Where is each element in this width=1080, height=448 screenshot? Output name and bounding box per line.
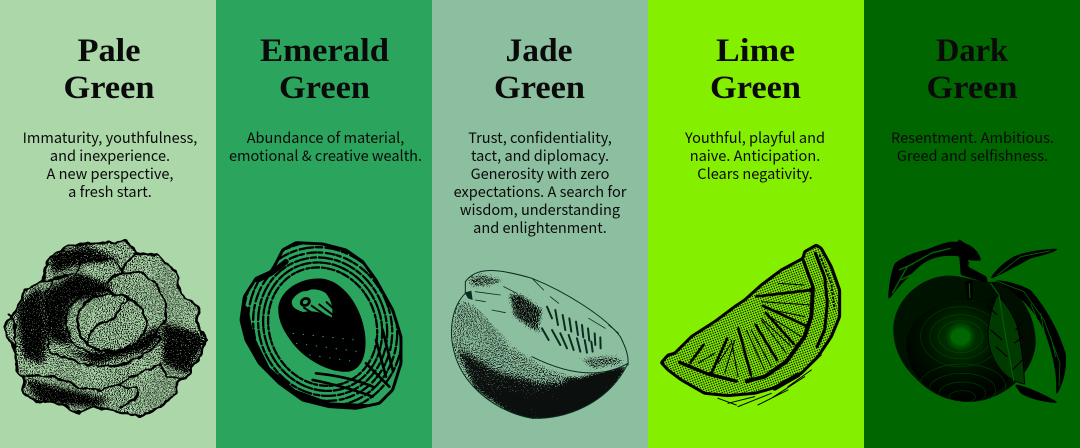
heading: emerald green [260,33,389,106]
leaf: right [992,280,1066,397]
leaf: centre [988,295,1025,384]
text: jade green meaning: wisdom, understanding [460,199,620,220]
text: lime green meaning: naive. Anticipation. [690,145,820,166]
text: dark green meaning [891,127,1054,166]
panel: pale green [0,0,216,448]
text: emerald green meaning: emotional & creative wealth. [229,145,422,166]
text: pale green meaning: Immaturity, youthfulness, [23,127,197,148]
panel: lime green [648,0,864,448]
panel: emerald green [216,0,432,448]
icon: lime wedge [658,243,845,407]
heading: emerald green: Emerald [260,33,389,69]
heading: emerald green: Green [279,70,370,106]
text: pale green meaning: and inexperience. [50,145,170,166]
panel: jade green [432,0,648,448]
icon: lettuce [0,237,213,420]
text: jade green meaning: and enlightenment. [473,217,607,238]
text: jade green meaning [454,127,627,238]
heading: jade green [494,33,585,106]
heading: jade green: Jade [506,33,572,69]
text: dark green meaning: Resentment. Ambitious. [891,127,1054,148]
stem band [958,238,988,283]
text: jade green meaning: Generosity with zero [471,163,610,184]
heading: lime green: Green [710,70,801,106]
heading: lime green: Lime [716,33,795,69]
heading: pale green: Pale [78,33,140,69]
text: dark green meaning: Greed and selfishness. [897,145,1048,166]
text: lime green meaning [684,127,825,184]
icon: peach with leaves [888,238,1066,409]
text: pale green meaning: a fresh start. [68,181,152,202]
heading: dark green: Dark [936,33,1009,69]
text: jade green meaning: tact, and diplomacy. [471,145,609,166]
fruit back lobe [893,276,1036,402]
leaf: top right [989,248,1061,280]
text: pale green meaning: A new perspective, [47,163,173,184]
heading: pale green: Green [64,70,154,106]
text: emerald green meaning [229,127,422,166]
fruit front lobe [906,293,1021,402]
text: emerald green meaning: Abundance of material, [247,127,404,148]
heading: dark green: Green [926,70,1018,106]
leaf: bottom tip [1014,384,1060,403]
icon: melon [449,271,629,423]
icon: avocado [240,241,402,410]
shadow hatching [718,355,821,407]
heading: dark green [926,33,1018,106]
heading: lime green [710,33,801,106]
heading: jade green: Green [494,70,585,106]
text: jade green meaning: expectations. A search for [454,181,627,202]
text: lime green meaning: Clears negativity. [697,163,813,184]
text: pale green meaning [23,127,197,202]
panel: dark green [864,0,1080,448]
stem [965,279,973,300]
text: lime green meaning: Youthful, playful and [684,127,825,148]
leaf: top left [888,242,981,301]
avocado pit [278,278,366,372]
text: jade green meaning: Trust, confidentiality, [468,127,612,148]
heading: pale green [64,33,154,106]
